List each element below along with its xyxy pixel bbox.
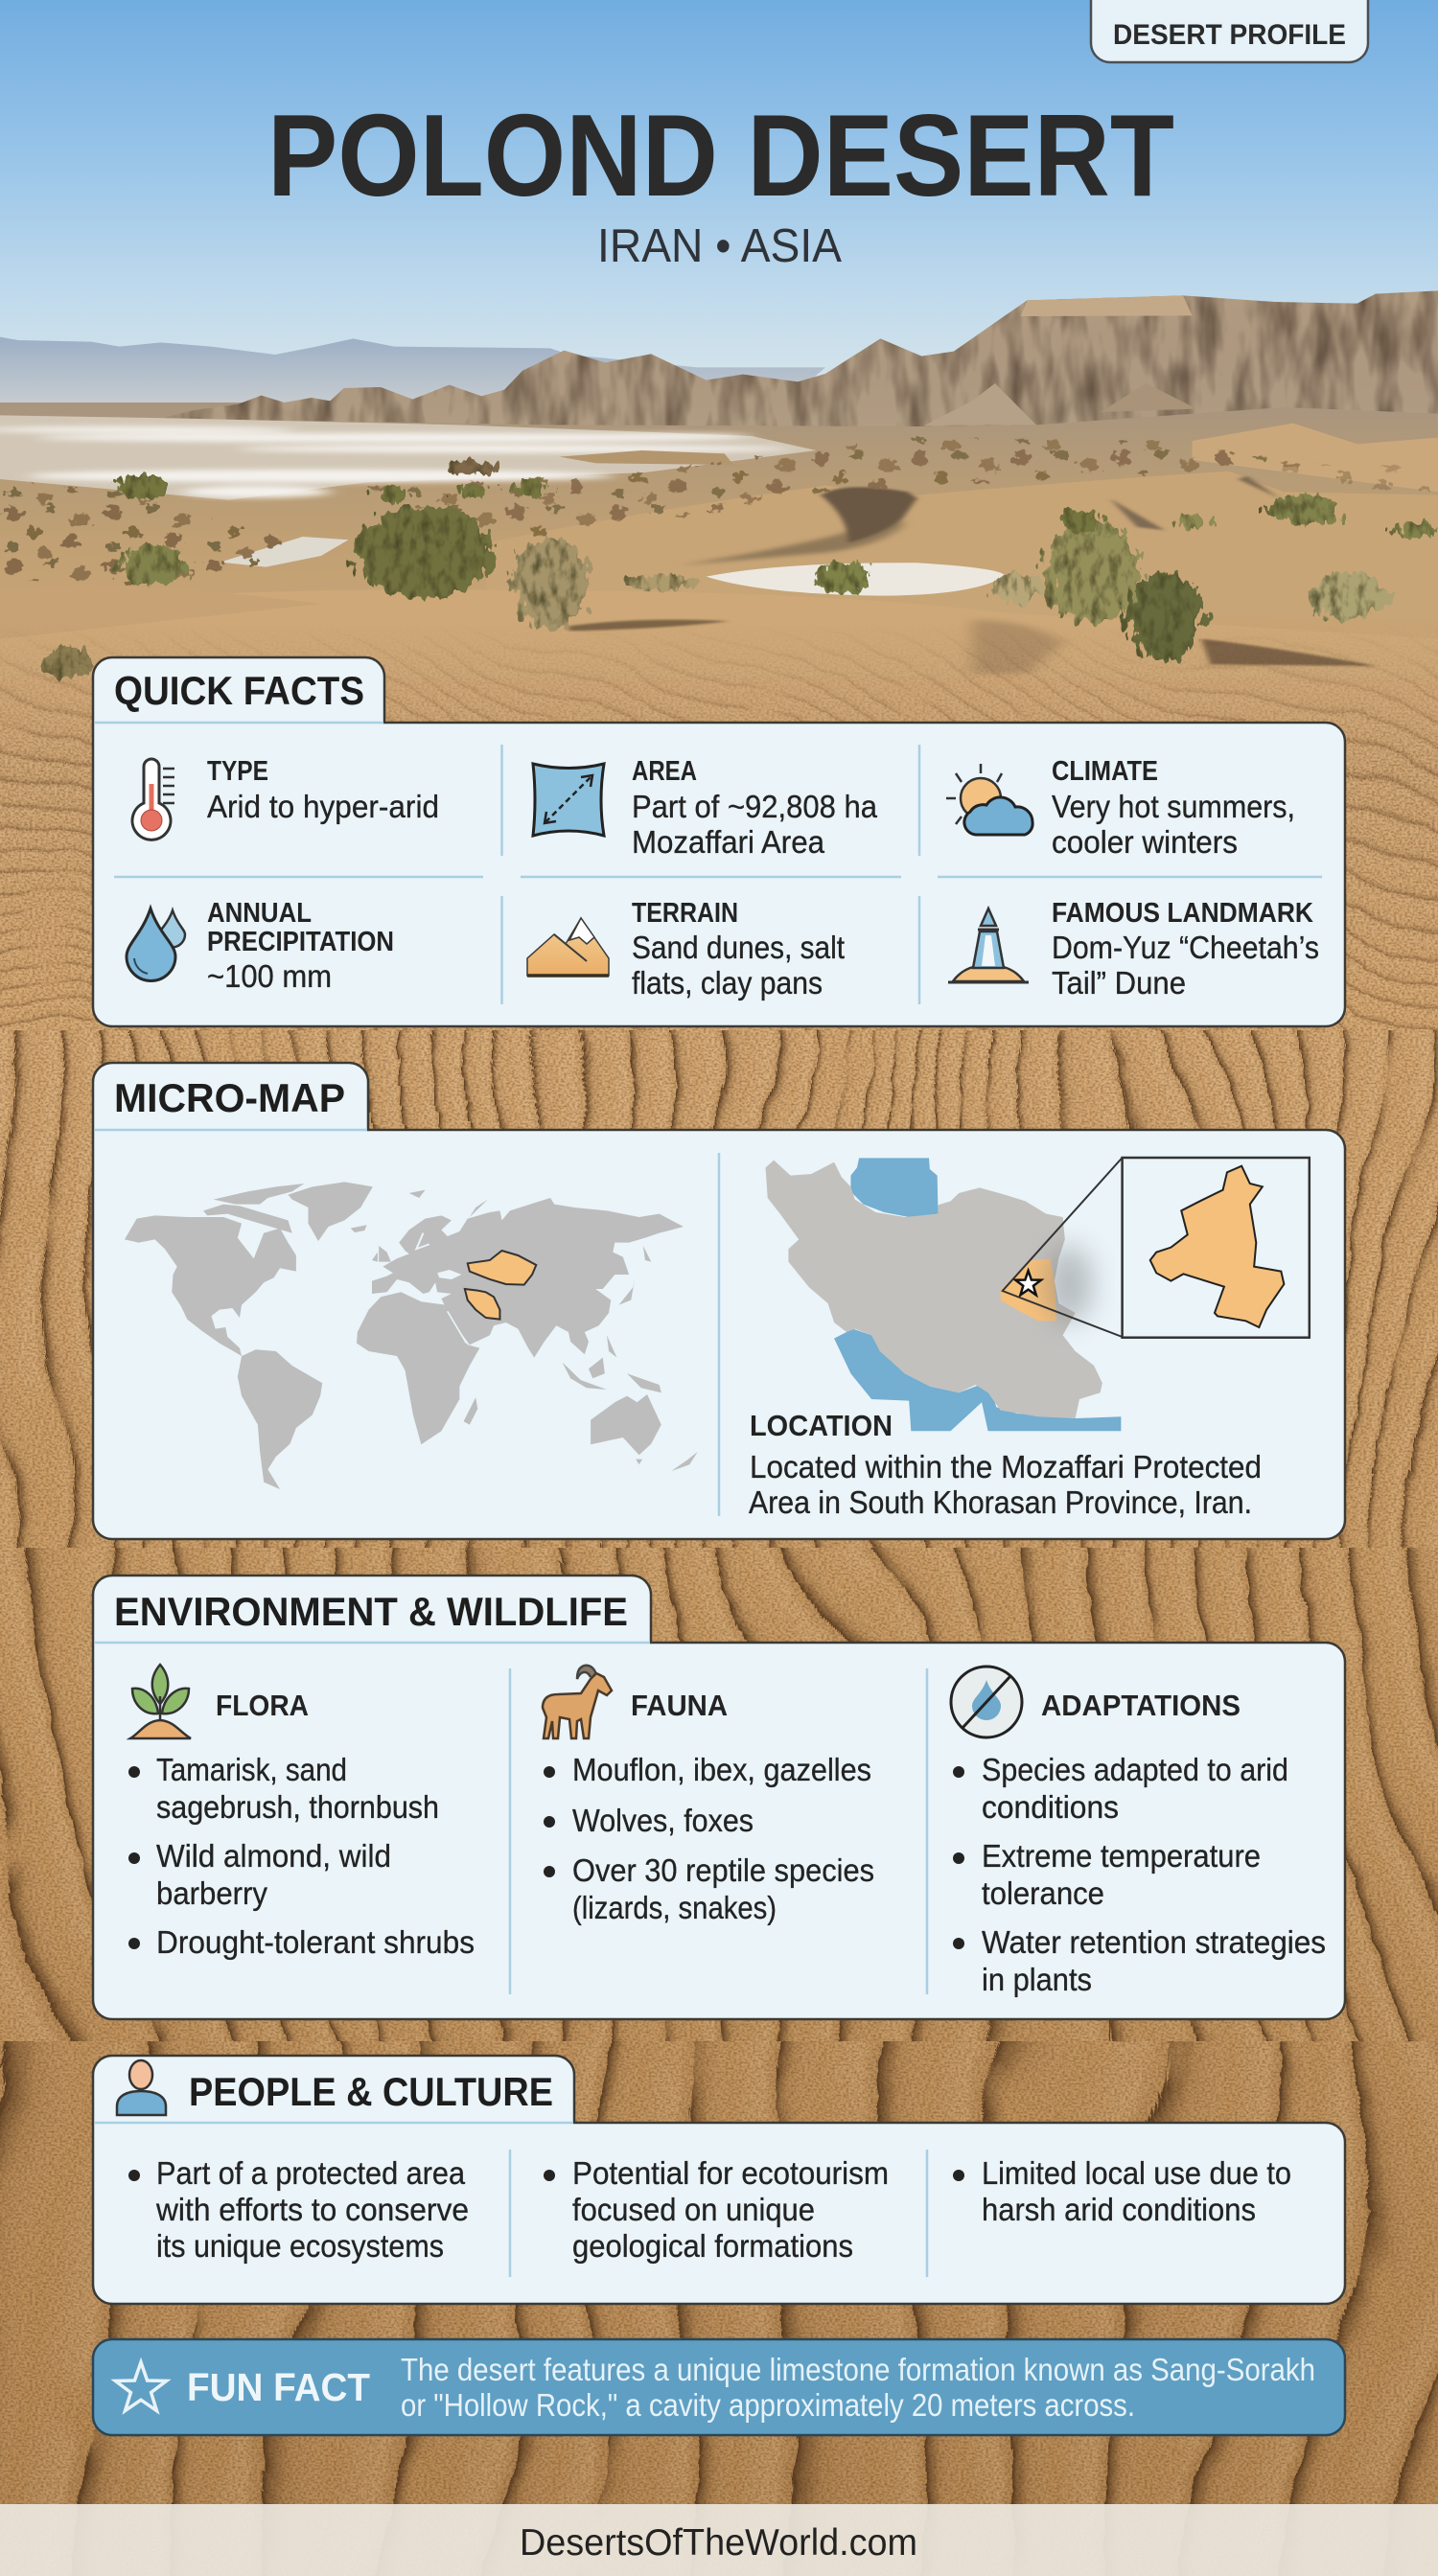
footer [0, 2504, 1438, 2576]
fact: climate: cooler winters [1052, 824, 1238, 860]
fact: terrain: TERRAIN [632, 898, 738, 929]
location text: LOCATION [750, 1409, 893, 1442]
fact: climate: CLIMATE [1052, 756, 1158, 787]
column: ecotourism: geological formations [572, 2228, 853, 2264]
panel: quick facts [93, 657, 1345, 1026]
icon: thermometer [132, 759, 174, 840]
fact: type: TYPE [207, 756, 268, 787]
column: flora: Wild almond, wild [156, 1838, 391, 1874]
icon: sun and cloud [946, 764, 1032, 835]
column: protected area: Part of a protected area [156, 2155, 466, 2191]
icon: area map [533, 764, 604, 836]
location text: Area in South Khorasan Province, Iran. [749, 1484, 1252, 1520]
icon: person [117, 2060, 166, 2115]
column: flora: FLORA [216, 1689, 309, 1722]
tag: desert profile: DESERT PROFILE [1113, 19, 1346, 51]
fact: area: AREA [632, 756, 697, 787]
fact: annual precipitation: ANNUAL [207, 898, 312, 929]
column: fauna: (lizards, snakes) [572, 1890, 777, 1925]
column: fauna [544, 1689, 874, 1925]
footer: DesertsOfTheWorld.com [520, 2522, 917, 2564]
fact: area [632, 756, 878, 860]
world map [117, 1182, 698, 1489]
column: flora: Tamarisk, sand [156, 1752, 347, 1787]
column: flora: sagebrush, thornbush [156, 1789, 439, 1825]
heading: micro-map: MICRO-MAP [114, 1075, 345, 1120]
fact: area: Part of ~92,808 ha [632, 789, 878, 824]
column: fauna: Wolves, foxes [572, 1803, 754, 1838]
column: flora: barberry [156, 1875, 267, 1911]
fact: terrain: flats, clay pans [632, 965, 823, 1000]
column: fauna: Over 30 reptile species [572, 1852, 874, 1888]
heading: quick facts: QUICK FACTS [114, 668, 364, 713]
column: ecotourism: focused on unique [572, 2192, 815, 2227]
fact: famous landmark: FAMOUS LANDMARK [1052, 898, 1313, 929]
tag: desert profile [1091, 0, 1368, 62]
heading: people and culture: PEOPLE & CULTURE [189, 2069, 553, 2114]
column: protected area: its unique ecosystems [156, 2228, 444, 2264]
column: ecotourism [544, 2155, 889, 2264]
heading: environment and wildlife: ENVIRONMENT & WILDLIFE [114, 1589, 628, 1634]
icon: landmark tower [948, 908, 1029, 982]
panel: environment and wildlife [93, 1576, 1345, 2019]
column: adaptations: in plants [982, 1962, 1092, 1997]
fact: climate [1052, 756, 1295, 860]
fact: annual precipitation [207, 898, 394, 994]
column: adaptations: tolerance [982, 1875, 1104, 1911]
panel: micro-map [93, 1063, 1345, 1539]
column: local use [953, 2155, 1291, 2227]
fact: famous landmark: Dom-Yuz “Cheetah’s [1052, 930, 1319, 965]
icon: sprout [130, 1665, 191, 1738]
fact: type [207, 756, 439, 824]
column: protected area: with efforts to conserve [155, 2192, 469, 2227]
heading: fun fact: FUN FACT [187, 2365, 370, 2409]
column: ecotourism: Potential for ecotourism [572, 2155, 889, 2191]
column: adaptations: Species adapted to arid [982, 1752, 1288, 1787]
column: adaptations [953, 1689, 1326, 1997]
column: fauna: FAUNA [631, 1689, 728, 1722]
icon: crossed water drop [951, 1667, 1022, 1737]
fact: terrain: Sand dunes, salt [632, 930, 845, 965]
callout: fun fact [93, 2339, 1345, 2435]
icon: star [115, 2362, 167, 2411]
subtitle: IRAN • ASIA [597, 220, 842, 272]
column: adaptations: Extreme temperature [982, 1838, 1261, 1874]
fact: annual precipitation: PRECIPITATION [207, 927, 394, 957]
icon: dune terrain [527, 918, 609, 976]
fact: type: Arid to hyper-arid [207, 789, 439, 824]
icon: ibex [543, 1666, 612, 1738]
column: local use: Limited local use due to [982, 2155, 1291, 2191]
fun fact text: or "Hollow Rock," a cavity approximately 20 meters across. [401, 2387, 1135, 2423]
fact: famous landmark: Tail” Dune [1052, 965, 1186, 1000]
column: protected area [128, 2155, 469, 2264]
location text [749, 1409, 1262, 1520]
column: flora: Drought-tolerant shrubs [156, 1924, 475, 1960]
fun fact text [401, 2352, 1315, 2423]
fact: climate: Very hot summers, [1052, 789, 1295, 824]
iran map with protected area [766, 1158, 1310, 1431]
column: adaptations: Water retention strategies [982, 1924, 1326, 1960]
fun fact text: The desert features a unique limestone formation known as Sang-Sorakh [401, 2352, 1315, 2387]
fact: area: Mozaffari Area [632, 824, 825, 860]
column: flora [128, 1689, 475, 1960]
fact: terrain [632, 898, 845, 1000]
location text: Located within the Mozaffari Protected [750, 1449, 1262, 1484]
fact: famous landmark [1052, 898, 1319, 1000]
fact: annual precipitation: ~100 mm [207, 958, 332, 994]
column: adaptations: conditions [982, 1789, 1119, 1825]
column: fauna: Mouflon, ibex, gazelles [572, 1752, 871, 1787]
panel: people and culture [93, 2056, 1345, 2304]
title: POLOND DESERT [267, 90, 1174, 220]
icon: water drops [127, 908, 185, 981]
column: local use: harsh arid conditions [982, 2192, 1256, 2227]
column: adaptations: ADAPTATIONS [1041, 1689, 1241, 1722]
